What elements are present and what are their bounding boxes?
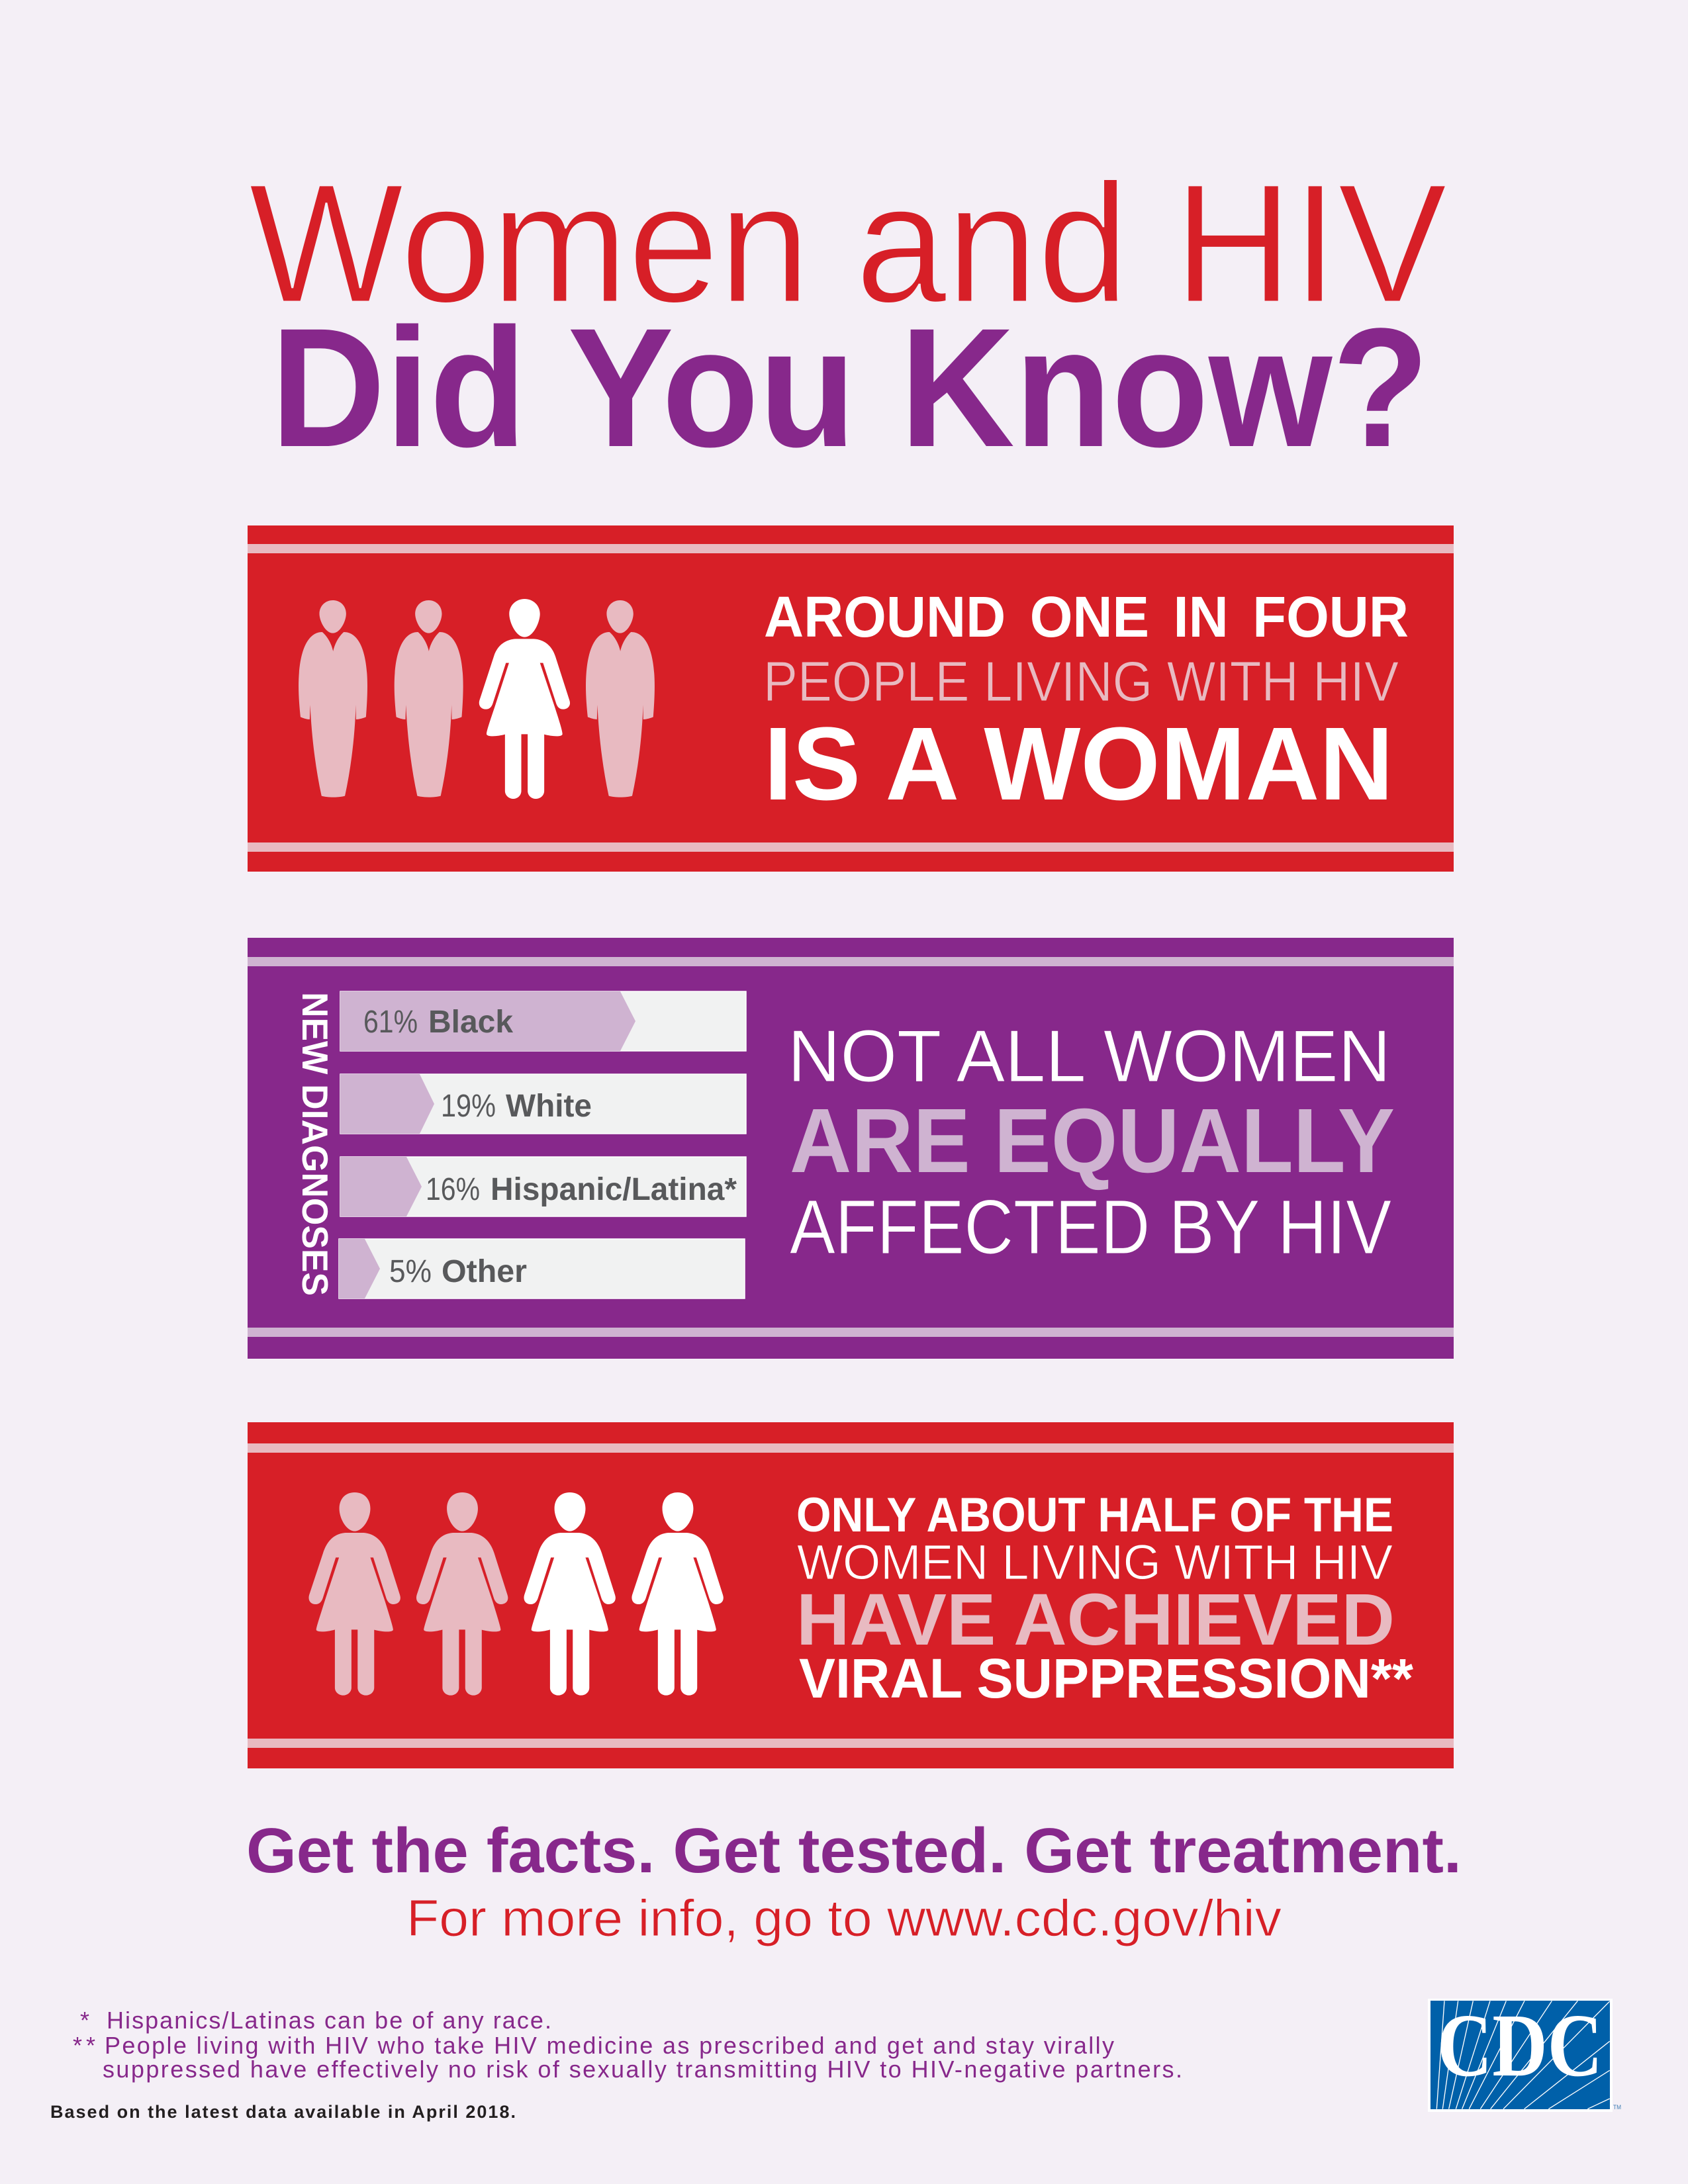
bar: 19% White: White xyxy=(506,1089,592,1124)
text: not all women: NOT ALL WOMEN xyxy=(788,1015,1391,1097)
text: are equally: ARE EQUALLY xyxy=(790,1090,1395,1192)
icon: woman 1 xyxy=(308,1492,400,1696)
pictogram: four women, two highlighted xyxy=(308,1492,724,1696)
footnote: viral suppression: ** xyxy=(73,2032,95,2059)
footnote: hispanics: Hispanics/Latinas can be of any race. xyxy=(107,2007,551,2034)
icon: man 2 xyxy=(395,600,463,797)
bar: 5% Other xyxy=(339,1239,745,1298)
footnote: viral suppression xyxy=(73,2032,1182,2083)
icon: man 1 xyxy=(299,600,367,797)
footnote: viral suppression: suppressed have effectively no risk of sexually transmitting HIV to HIV-negative partners. xyxy=(103,2056,1182,2083)
tagline: Get the facts. Get tested. Get treatment. xyxy=(246,1815,1462,1886)
bar: 5% Other: 5% xyxy=(389,1254,432,1289)
bar: 61% Black: Black xyxy=(428,1005,513,1040)
pictogram: three men and one woman xyxy=(299,599,655,799)
text: only about half of the: ONLY ABOUT HALF OF THE xyxy=(796,1488,1393,1542)
bar: 19% White: 19% xyxy=(441,1089,496,1124)
icon: woman 2 xyxy=(416,1492,508,1696)
bar: 5% Other: Other xyxy=(442,1254,527,1289)
icon: woman 4 xyxy=(632,1492,724,1696)
source note: Based on the latest data available in April 2018. xyxy=(50,2102,516,2122)
text: women living with HIV: WOMEN LIVING WITH HIV xyxy=(797,1535,1393,1590)
bar: 19% White xyxy=(340,1074,746,1134)
icon: woman xyxy=(479,599,570,799)
footnote: viral suppression: People living with HIV who take HIV medicine as prescribed and get and stay virally xyxy=(105,2032,1114,2059)
title line: Did You Know?: Did You Know? xyxy=(271,293,1429,482)
footnote: hispanics: * xyxy=(80,2007,89,2034)
panel: around one in four xyxy=(248,525,1454,872)
text: have achieved: HAVE ACHIEVED xyxy=(796,1579,1395,1661)
panel: viral suppression xyxy=(248,1422,1454,1768)
bar: 16% Hispanic/Latina: Hispanic/Latina* xyxy=(491,1172,737,1207)
logo: CDC: CDC xyxy=(1437,1996,1603,2095)
footnotes xyxy=(73,2007,1182,2083)
text: is a woman: IS A WOMAN xyxy=(764,706,1393,822)
logo: CDC: TM xyxy=(1613,2104,1621,2111)
bar: 16% Hispanic/Latina: 16% xyxy=(426,1172,480,1207)
text: around one in four: AROUND ONE IN FOUR xyxy=(764,585,1409,649)
text: people living with HIV: PEOPLE LIVING WITH HIV xyxy=(763,651,1399,713)
text: affected by HIV: AFFECTED BY HIV xyxy=(790,1184,1391,1270)
icon: woman 3 xyxy=(524,1492,616,1696)
panel: not all women are equally affected xyxy=(248,938,1454,1359)
bar chart: new diagnoses by race xyxy=(339,991,746,1298)
bar: 61% Black: 61% xyxy=(363,1005,418,1040)
bar: 16% Hispanic/Latina xyxy=(340,1157,746,1216)
bar: 61% Black xyxy=(340,991,746,1051)
title line: Women and HIV: Women and HIV xyxy=(249,149,1447,338)
axis label: new diagnoses: NEW DIAGNOSES xyxy=(295,992,336,1296)
title xyxy=(249,149,1447,482)
icon: man 3 xyxy=(586,600,655,797)
text: viral suppression: VIRAL SUPPRESSION** xyxy=(799,1647,1413,1709)
website line: For more info, go to www.cdc.gov/hiv xyxy=(406,1889,1282,1947)
